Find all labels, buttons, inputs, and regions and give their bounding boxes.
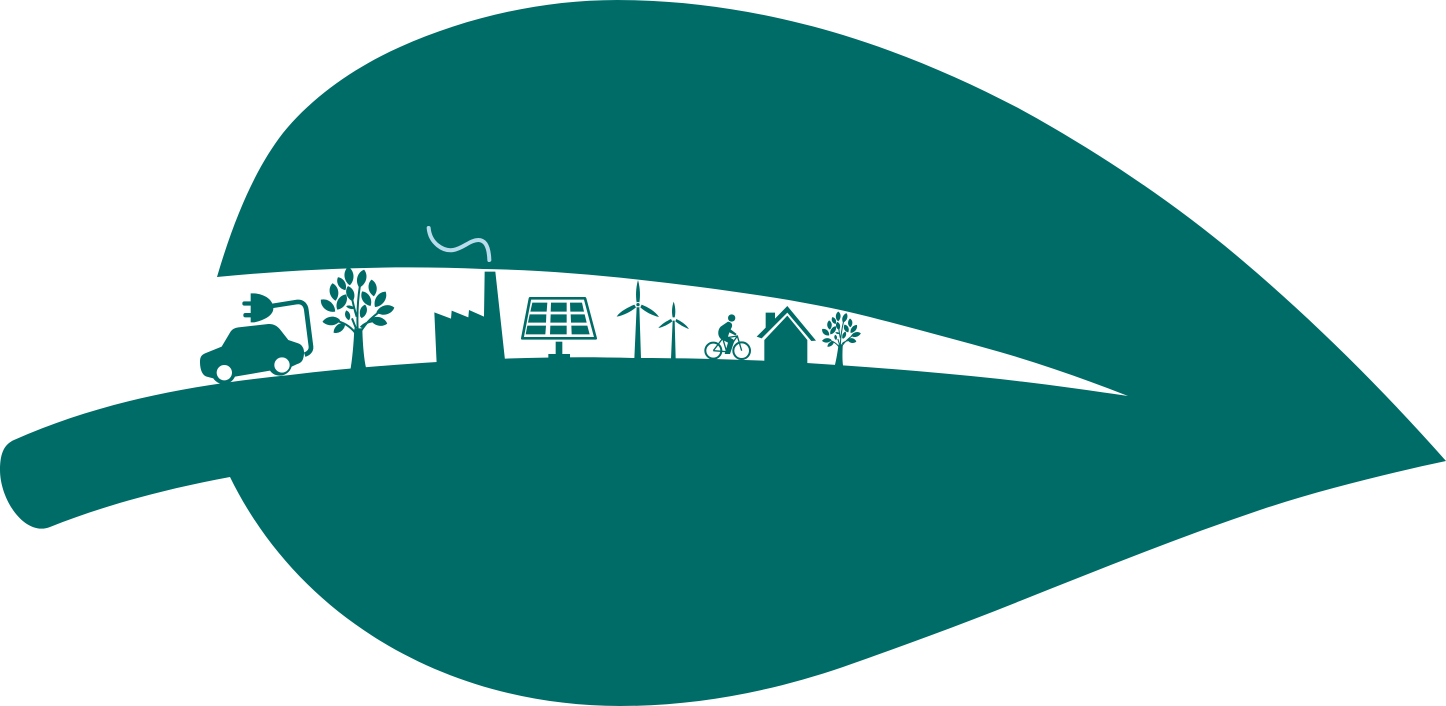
icon: charging plug and cable [242,293,311,355]
icon: small wind turbine [658,302,689,359]
icon group: solar panel, turbines, cyclist, house [522,280,816,364]
icon: electric car [200,324,304,384]
icon: large wind turbine [617,280,659,359]
icon group: car, tree, factory [200,228,505,384]
icon: large tree [318,266,396,372]
icon: small tree [817,311,863,367]
icon: factory [434,272,505,364]
icon: cyclist [705,314,750,359]
icon: smoke [429,228,489,260]
icon: solar panel [522,298,596,359]
icon: house [757,306,816,364]
